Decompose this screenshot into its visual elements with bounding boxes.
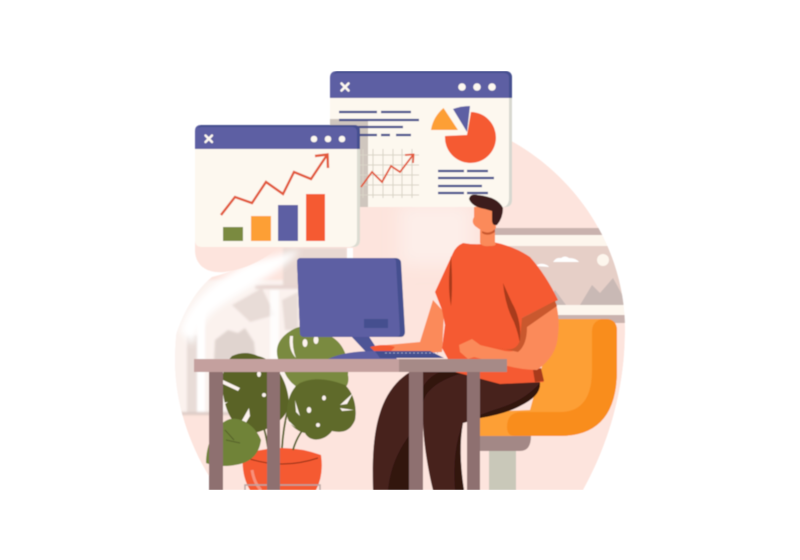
leaf: small light (206, 419, 261, 466)
stems (263, 386, 303, 451)
neck shadow (482, 228, 495, 235)
window: back dashboard (330, 71, 512, 207)
neck (480, 230, 496, 246)
hand (459, 339, 483, 359)
window: front growth chart (195, 125, 360, 247)
far hand sleeve (370, 345, 395, 351)
chair (480, 319, 617, 490)
sleeve shadow (486, 301, 557, 352)
monitor (297, 258, 405, 359)
trouser shadows (388, 372, 540, 490)
leaf: top (277, 327, 348, 393)
shirt creases (449, 256, 544, 382)
leaf: left holes (222, 371, 266, 426)
background blob with room scene (170, 112, 630, 490)
monitor side (297, 258, 405, 337)
bar chart (223, 194, 325, 241)
white haze over left side (165, 240, 272, 350)
icon: window dots (311, 136, 345, 142)
monitor stand (350, 335, 379, 352)
icon: window dots (458, 83, 496, 91)
pie chart (431, 106, 496, 163)
desk legs (209, 372, 480, 490)
desk (194, 359, 507, 490)
chair base (480, 436, 531, 451)
trend arrow (221, 154, 328, 215)
arm (462, 303, 559, 370)
desk top (194, 359, 507, 372)
artwork group (165, 71, 630, 490)
chair post (489, 450, 516, 490)
person (370, 194, 559, 490)
leaf: left dark (222, 353, 289, 434)
face (473, 205, 496, 232)
trousers (373, 372, 540, 490)
leaf: top holes (290, 336, 318, 358)
monitor base (328, 351, 397, 359)
plant (206, 327, 356, 490)
icon: close (206, 136, 212, 142)
leaf: right holes (285, 393, 354, 428)
left window scene (170, 248, 347, 415)
monitor label (364, 319, 388, 328)
monitor front (297, 258, 400, 337)
pot (243, 448, 322, 490)
text lines upper (339, 112, 419, 135)
hair (469, 194, 503, 225)
shadow of front window (330, 119, 368, 207)
far arm (375, 300, 444, 354)
chair seat and back (480, 319, 617, 436)
illustration: analyst at desk with dashboards (175, 71, 626, 490)
line chart on grid (360, 149, 419, 198)
right window scene (495, 228, 630, 323)
chair cushion edge (507, 319, 617, 436)
icon: close (342, 84, 348, 90)
keyboard (375, 351, 444, 358)
leaf: small details (225, 430, 240, 443)
shirt (435, 242, 558, 384)
text lines lower (438, 171, 494, 193)
pink blob under front window (195, 240, 285, 272)
leaf: right dark (287, 379, 356, 440)
